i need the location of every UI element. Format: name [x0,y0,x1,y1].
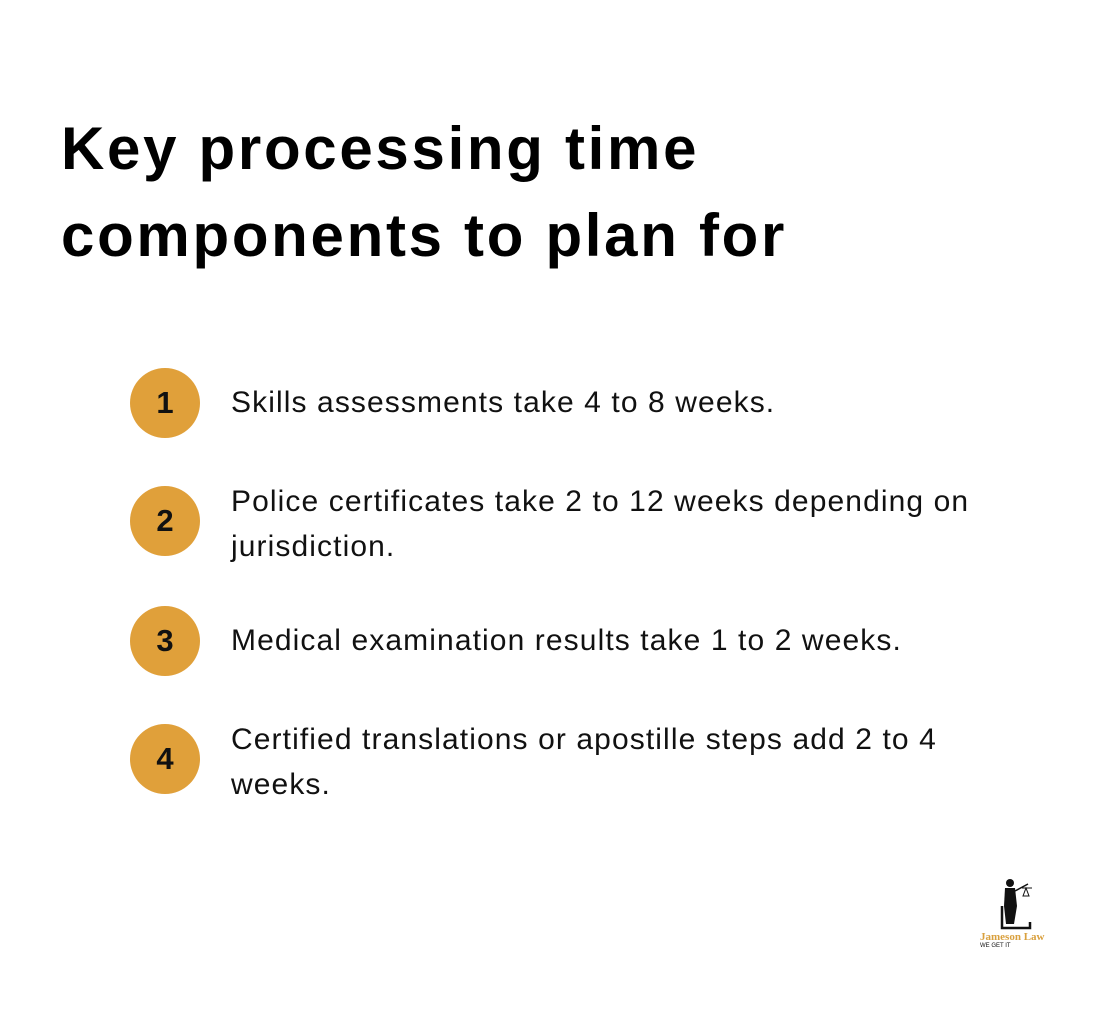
text 2: Police certificates take 2 to 12 weeks depending on jurisdiction. [231,485,969,563]
circle 2 [130,486,200,556]
text 4: Certified translations or apostille steps add 2 to 4 weeks. [231,723,937,801]
text 1: Skills assessments take 4 to 8 weeks. [231,386,775,419]
title: Key processing time [61,115,699,182]
text 3: Medical examination results take 1 to 2 weeks. [231,624,902,657]
item 1 [130,368,775,438]
icon: justice figure [1000,879,1032,930]
item 4 [130,723,937,801]
circle 4 [130,724,200,794]
circle 4: 4 [156,741,174,776]
circle 1: 1 [156,385,174,420]
title: components to plan for [61,202,787,269]
logo text: Jameson Law [980,931,1044,943]
circle 3: 3 [156,623,174,658]
item 3 [130,606,902,676]
title [61,115,787,269]
logo [980,879,1044,949]
circle 3 [130,606,200,676]
circle 2: 2 [156,503,174,538]
circle 1 [130,368,200,438]
item 2 [130,485,969,563]
logo: WE GET IT [980,943,1011,949]
